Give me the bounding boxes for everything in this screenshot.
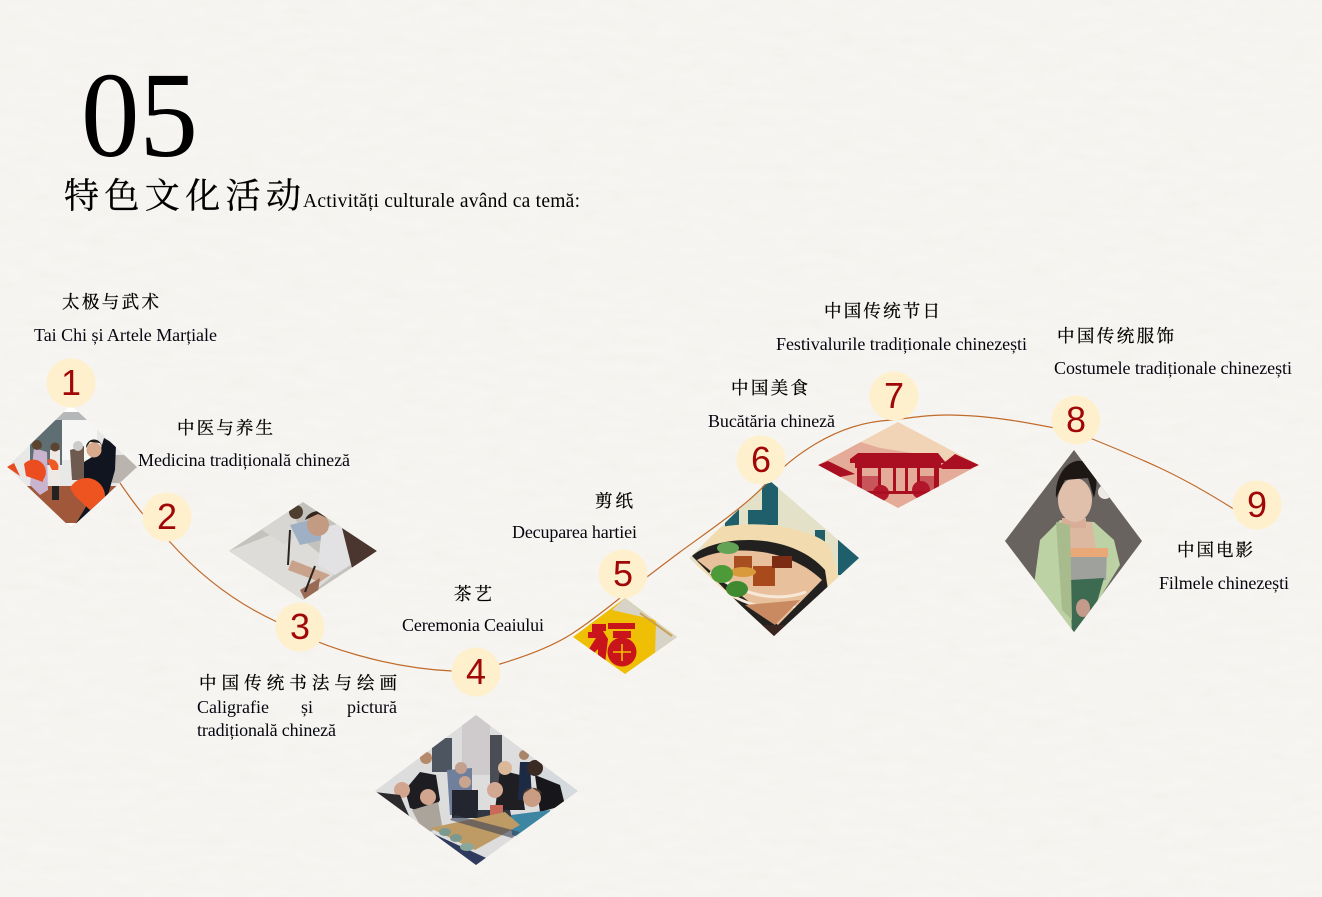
label: films Chinese: 中国电影 [1177, 540, 1253, 560]
label: tea Chinese: 茶艺 [454, 584, 492, 604]
photo: noodle bowl diamond [689, 482, 859, 636]
item 2: Traditional medicine [138, 418, 380, 605]
label: calligraphy Romanian: și [301, 697, 313, 717]
label: costumes Chinese: 中国传统服饰 [1057, 326, 1174, 346]
number badge 5: 5 [613, 553, 633, 594]
label: calligraphy Romanian: tradițională chineză [197, 720, 336, 740]
photo: woman in hanfu diamond [1005, 450, 1142, 632]
number badge 6: 6 [751, 439, 771, 480]
number badge 8 [1052, 396, 1100, 444]
label: Tai Chi Chinese: 太极与武术 [62, 292, 159, 312]
number badge 2: 2 [157, 496, 177, 537]
label: medicine Chinese: 中医与养生 [177, 418, 273, 438]
title: Chinese heading: 特色文化活动 [64, 177, 301, 216]
label: cuisine Romanian: Bucătăria chineză [708, 411, 835, 431]
label: costumes Romanian: Costumele tradiționale chinezești [1054, 358, 1292, 378]
number badge 5 [598, 550, 648, 598]
label: tea Romanian: Ceremonia Ceaiului [402, 615, 544, 635]
item 1: Tai Chi [0, 292, 217, 532]
subtitle: Romanian heading: Activități culturale având ca temă: [303, 191, 580, 212]
number badge 3 [276, 602, 324, 652]
number badge 7: 7 [884, 375, 904, 416]
label: Tai Chi Romanian: Tai Chi și Artele Marțiale [34, 325, 217, 345]
label: festivals Romanian: Festivalurile tradiționale chinezești [776, 334, 1027, 354]
label: paper cutting Chinese: 剪纸 [595, 491, 634, 511]
item 3: Calligraphy [197, 673, 397, 740]
photo: tea ceremony diamond [375, 715, 578, 865]
number badge 4: 4 [466, 651, 486, 692]
number badge 3: 3 [290, 606, 310, 647]
label: films Romanian: Filmele chinezești [1159, 573, 1289, 593]
number badge 9: 9 [1247, 484, 1267, 525]
section number: 05 [81, 48, 198, 183]
label: calligraphy Chinese: 中国传统书法与绘画 [199, 673, 397, 693]
label: cuisine Chinese: 中国美食 [731, 378, 808, 398]
item 5: Paper cutting [512, 491, 680, 677]
photo: Tai Chi fans diamond [7, 408, 137, 528]
item 8: Traditional costumes [1000, 326, 1292, 640]
label: paper cutting Romanian: Decuparea hartiei [512, 522, 637, 542]
number badge 1 [46, 358, 96, 408]
number badges [46, 358, 1282, 696]
label: medicine Romanian: Medicina tradițională chineză [138, 450, 350, 470]
number badge 7 [870, 372, 918, 420]
number badge 8: 8 [1066, 399, 1086, 440]
photo: paper-cut fu diamond [573, 598, 677, 674]
item 7: Traditional festivals [776, 301, 1027, 510]
item 4: Tea ceremony [370, 584, 582, 870]
label: calligraphy Romanian: Caligrafie [197, 697, 269, 717]
winding timeline curve [120, 415, 1240, 671]
number badge 9 [1232, 480, 1282, 530]
number badge 1: 1 [61, 362, 81, 403]
label: calligraphy Romanian: pictură [347, 697, 397, 717]
item 6: Chinese cuisine [685, 378, 863, 640]
photo: paper-cut house diamond [815, 420, 983, 510]
number badge 6 [736, 436, 786, 484]
number badge 4 [452, 648, 500, 696]
number badge 2 [142, 492, 192, 542]
label: festivals Chinese: 中国传统节日 [824, 301, 940, 321]
label: calligraphy Romanian [197, 697, 397, 740]
photo: medicine class diamond [229, 502, 377, 600]
item 9: Chinese films [1159, 540, 1289, 593]
